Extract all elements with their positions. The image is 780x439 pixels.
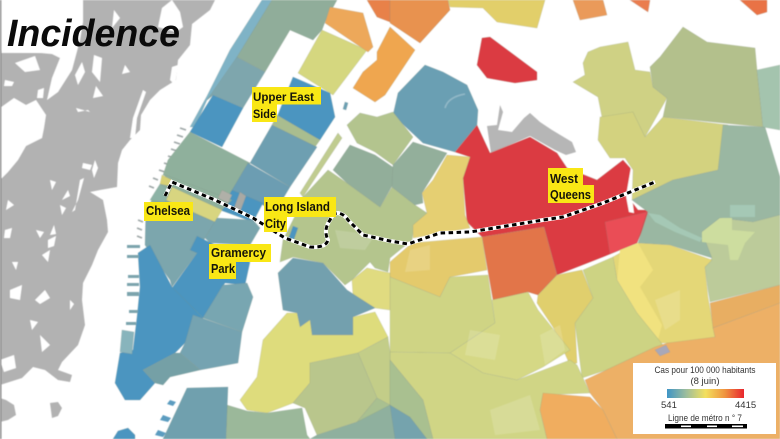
label: Gramercy Park: Gramercy [211,246,266,260]
label: Long Island City: City [265,217,286,231]
Queens south [390,237,780,439]
label: West Queens [548,168,594,203]
legend panel [633,363,776,434]
Manhattan north [148,0,367,222]
label: West Queens: Queens [550,188,591,202]
label: Chelsea: Chelsea [146,204,191,218]
metro legend label: Ligne de métro n ° 7 [668,413,742,424]
legend panel: (8 juin) [690,376,720,387]
label: West Queens: West [550,172,579,186]
label: Chelsea [144,202,193,221]
grey shoreline north of Queens [487,105,576,155]
North: Bronx edge [325,0,767,102]
New Jersey grey landmass [0,0,215,439]
texture patches [335,230,680,435]
scale minimum: 541 [661,400,677,411]
west side piers [137,128,186,238]
label: Long Island City [264,197,336,232]
Queens north-east [573,27,780,302]
East River boroughs: Astoria and Long Island City [280,65,478,285]
Queens hot spot [413,125,648,300]
metro legend line [665,424,747,428]
label: Upper East Side: Upper East [253,90,314,104]
Brooklyn [113,94,465,439]
label: Upper East Side [252,87,321,122]
Manhattan south [115,202,260,400]
title: Incidence [7,13,180,55]
label: Long Island City: Long Island [265,200,330,214]
colour scale [667,389,744,398]
label: Upper East Side: Side [253,107,276,121]
legend title: Cas pour 100 000 habitants [654,365,756,376]
label: Gramercy Park [209,244,271,279]
label: Gramercy Park: Park [211,262,235,276]
scale maximum: 4415 [735,400,756,411]
metro line 7 [165,182,655,247]
